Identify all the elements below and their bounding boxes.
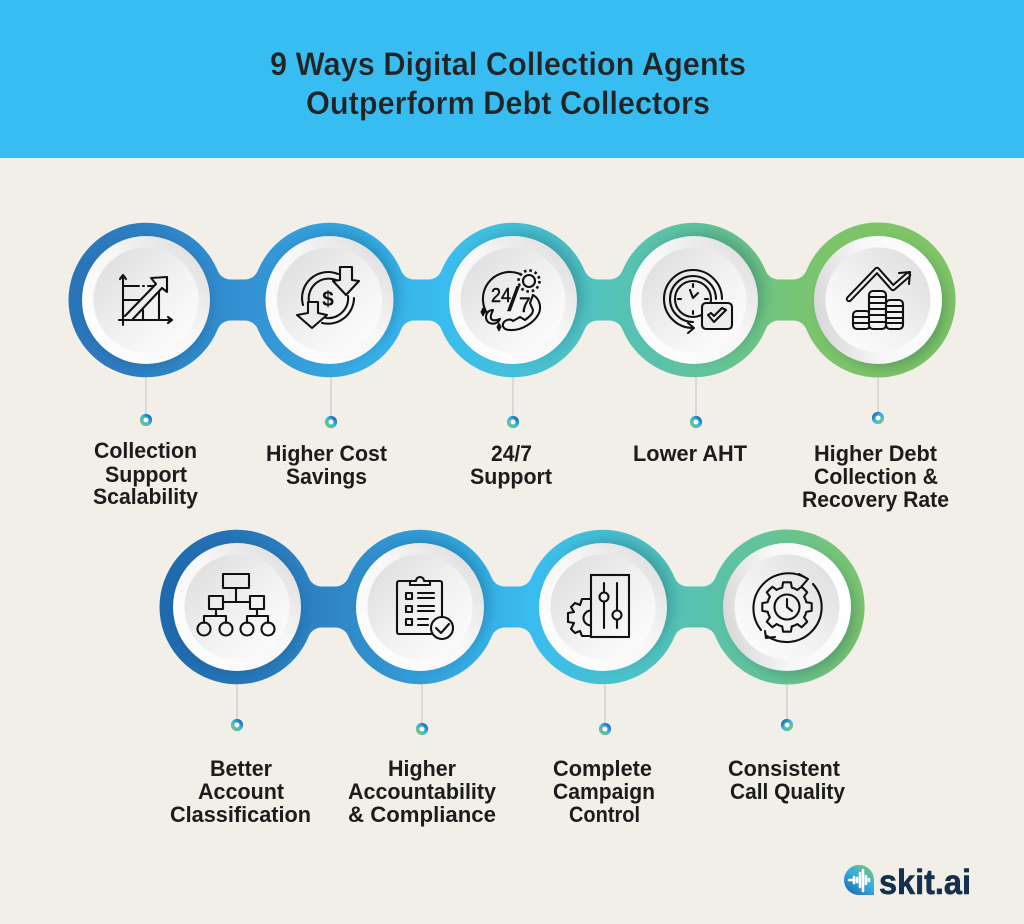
label: Complete Campaign Control: Campaign xyxy=(553,779,655,804)
label: Higher Accountability & Compliance: Higher xyxy=(388,756,456,781)
connector pins row 2 xyxy=(237,684,787,723)
header band xyxy=(0,0,1024,158)
label: Consistent Call Quality: Call Quality xyxy=(730,779,846,804)
label: Higher Accountability & Compliance: & Compliance xyxy=(348,802,496,827)
label: Collection Support Scalability: Scalability xyxy=(93,484,199,509)
label: Higher Accountability & Compliance: Accountability xyxy=(348,779,497,804)
icon: clipboard checklist xyxy=(397,577,453,639)
gradient chain row 1 xyxy=(68,222,956,378)
label: Better Account Classification xyxy=(170,756,311,827)
label: Collection Support Scalability: Collection xyxy=(94,438,197,463)
label: Higher Accountability & Compliance xyxy=(348,756,497,827)
gradient chain row 2 xyxy=(160,530,865,684)
discs row 1 xyxy=(82,236,942,364)
label: Better Account Classification: Classification xyxy=(170,802,311,827)
label: 24/7 Support: Support xyxy=(470,464,553,489)
label: Higher Cost Savings: Higher Cost xyxy=(266,441,388,466)
title: 9 Ways Digital Collection Agents xyxy=(270,46,746,82)
label: Higher Debt Collection & Recovery Rate: Higher Debt xyxy=(814,441,938,466)
pin dots row 2 xyxy=(233,721,791,733)
icon: 24/7 phone support: 24 xyxy=(491,285,511,307)
icon: cost savings dollar cycle: $ xyxy=(322,288,334,311)
label: 24/7 Support: 24/7 xyxy=(491,441,532,466)
label: Better Account Classification: Better xyxy=(210,756,272,781)
label: Higher Debt Collection & Recovery Rate xyxy=(802,441,949,512)
icon: 24/7 phone support xyxy=(481,270,540,331)
icon: gear with control sliders xyxy=(568,575,629,637)
icon: growth chart xyxy=(119,275,172,325)
logo: skit.ai xyxy=(844,863,971,902)
icon: 24/7 phone support: / xyxy=(507,281,521,319)
discs row 2 xyxy=(173,543,851,671)
title: Outperform Debt Collectors xyxy=(306,85,710,121)
label: Complete Campaign Control: Control xyxy=(569,802,640,827)
label: Higher Cost Savings: Savings xyxy=(286,464,367,489)
label: 24/7 Support xyxy=(470,441,553,489)
connector pins row 1 xyxy=(146,377,878,416)
icon: cost savings dollar cycle xyxy=(297,267,359,328)
logo: skit.ai: skit.ai xyxy=(879,863,971,902)
icon: org hierarchy xyxy=(198,574,274,636)
icon: coins with rising arrow xyxy=(849,270,910,329)
label: Better Account Classification: Account xyxy=(198,779,285,804)
label: Higher Cost Savings xyxy=(266,441,388,489)
label: Consistent Call Quality: Consistent xyxy=(728,756,841,781)
label: Complete Campaign Control: Complete xyxy=(553,756,652,781)
label: Consistent Call Quality xyxy=(728,756,846,804)
icon: gear clock cycle xyxy=(753,573,822,642)
label: Higher Debt Collection & Recovery Rate: Recovery Rate xyxy=(802,487,949,512)
label: Complete Campaign Control xyxy=(553,756,655,827)
icon: clock with check box xyxy=(664,270,732,333)
title xyxy=(270,46,746,121)
label: Lower AHT: Lower AHT xyxy=(633,441,748,466)
label: Collection Support Scalability: Support xyxy=(105,462,188,487)
pin dots row 1 xyxy=(142,414,882,426)
label: Higher Debt Collection & Recovery Rate: Collection & xyxy=(814,464,938,489)
label: Collection Support Scalability xyxy=(93,438,199,509)
icon: 24/7 phone support: 7 xyxy=(519,294,531,317)
